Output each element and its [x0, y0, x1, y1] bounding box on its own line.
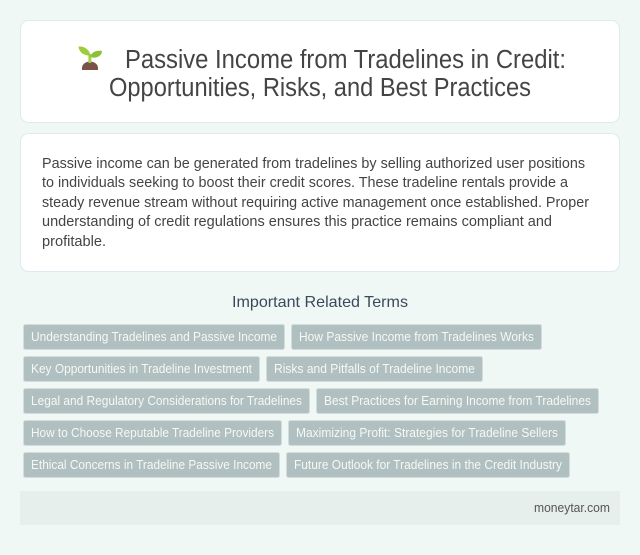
- description text: to individuals seeking to boost their credit scores. These tradeline rentals provide a: [42, 174, 569, 191]
- tag list: [24, 324, 598, 478]
- tag: Risks and Pitfalls of Tradeline Income: [274, 362, 475, 376]
- tag: [266, 356, 482, 382]
- description text: profitable.: [42, 233, 106, 250]
- tag: Ethical Concerns in Tradeline Passive Income: [31, 458, 272, 472]
- tag: How Passive Income from Tradelines Works: [299, 330, 534, 344]
- tag: Key Opportunities in Tradeline Investment: [31, 362, 252, 376]
- tag: Future Outlook for Tradelines in the Credit Industry: [294, 458, 563, 472]
- description text: understanding of credit regulations ensures this practice remains compliant and: [42, 213, 552, 230]
- tag: [316, 388, 598, 414]
- title text: Passive Income from Tradelines in Credit:: [125, 46, 566, 74]
- tag: [24, 452, 280, 478]
- tag: Understanding Tradelines and Passive Income: [31, 330, 277, 344]
- heading: related terms: Important Related Terms: [232, 294, 408, 311]
- tag: [286, 452, 570, 478]
- panel: title: [20, 20, 620, 122]
- tag: [24, 388, 310, 414]
- description text: steady revenue stream without requiring active management once established. Proper: [42, 194, 589, 211]
- tag: Maximizing Profit: Strategies for Tradeline Sellers: [296, 426, 558, 440]
- tag: [24, 356, 260, 382]
- panel: description: [20, 134, 620, 272]
- tag: Legal and Regulatory Considerations for Tradelines: [31, 394, 302, 408]
- footer: [20, 491, 620, 525]
- tag: [292, 324, 542, 350]
- tag: [288, 420, 566, 446]
- description text: Passive income can be generated from tradelines by selling authorized user positions: [42, 155, 585, 172]
- title text: Opportunities, Risks, and Best Practices: [109, 74, 531, 102]
- icon: seedling: [78, 46, 102, 70]
- tag: [24, 420, 282, 446]
- footer source text: moneytar.com: [534, 501, 610, 515]
- tag: Best Practices for Earning Income from Tradelines: [324, 394, 591, 408]
- tag: [24, 324, 284, 350]
- tag: How to Choose Reputable Tradeline Providers: [31, 426, 274, 440]
